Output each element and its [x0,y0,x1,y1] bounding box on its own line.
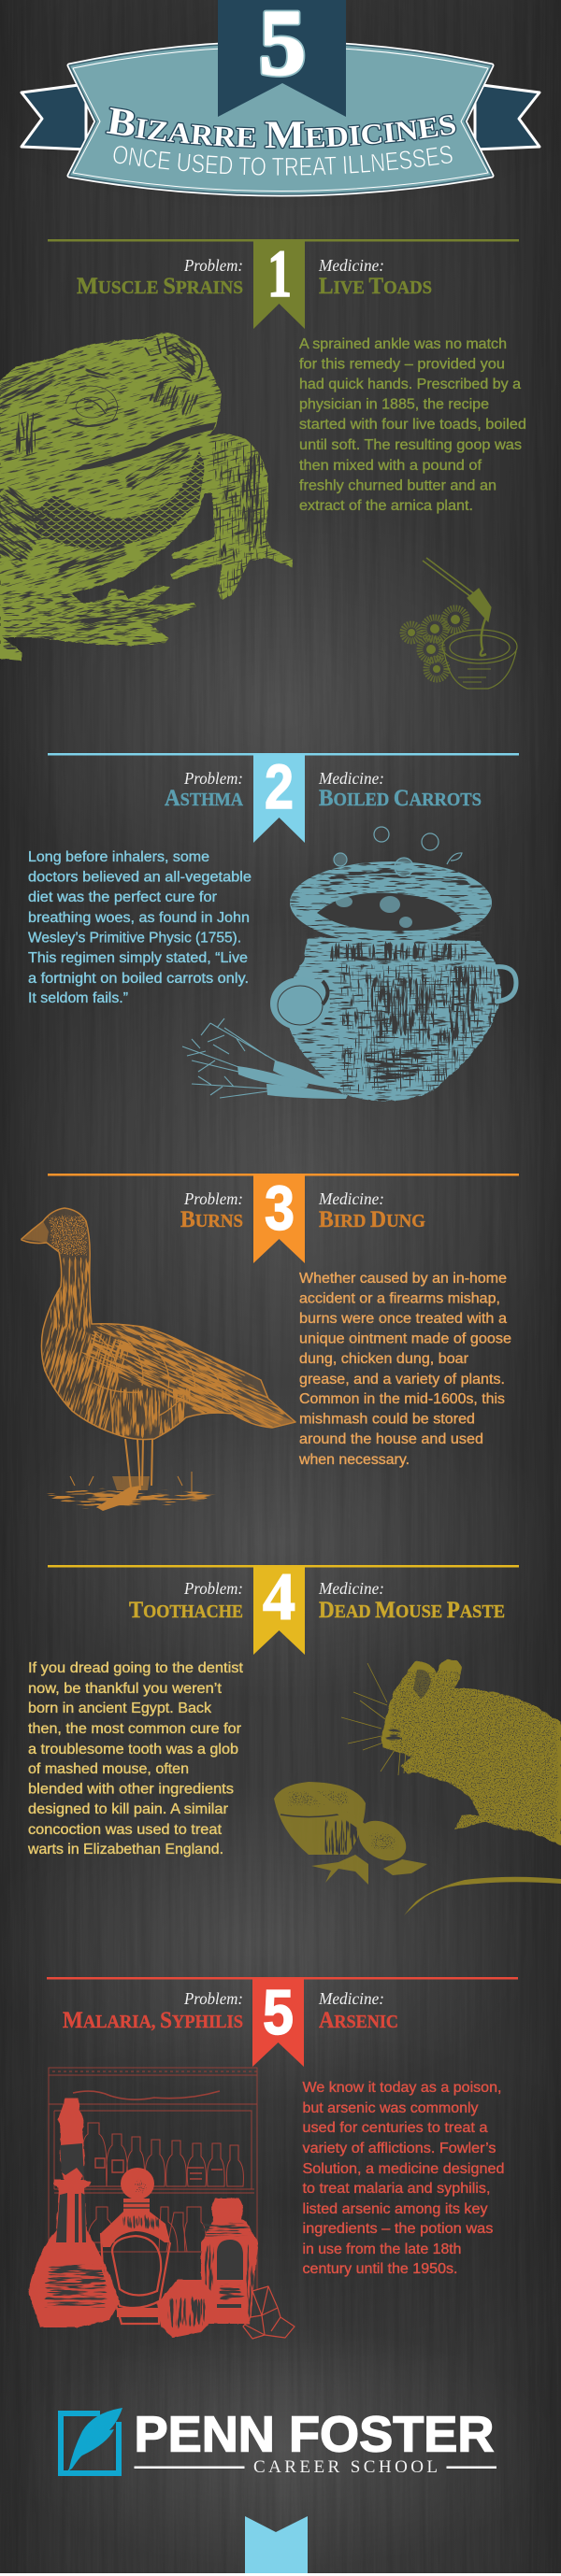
decanter [28,2099,120,2327]
body text: diet was the perfect cure for [28,890,217,905]
body text: now, be thankful you weren’t [28,1681,223,1697]
problem label: MALARIA, SYPHILIS [63,2008,243,2033]
goose plumage [43,1214,294,1439]
body text: Solution, a medicine designed [303,2161,505,2177]
icon: toad illustration [0,332,293,662]
number 3: 3 [265,1174,295,1244]
body text: burns were once treated with a [299,1311,507,1327]
number 4: 4 [263,1559,295,1634]
body text: accident or a firearms mishap, [299,1291,500,1306]
problem label: ASTHMA [165,786,244,811]
pot overall texture and hatching [280,860,505,1107]
body text: ingredients – the potion was [303,2221,494,2237]
toad eye highlights [149,391,183,406]
toad overall hatch [0,332,293,658]
mouse fur shading [385,1669,561,1839]
toad snout marks [145,336,202,385]
body text: concoction was used to treat [28,1822,223,1838]
pot bubbles [334,827,462,876]
toad eye [65,386,118,426]
body text: when necessary. [298,1452,410,1468]
body text: dung, chicken dung, boar [299,1351,468,1367]
logo feather [66,2408,122,2472]
shelf bottles [82,2123,243,2252]
body text: designed to kill pain. A similar [28,1801,228,1817]
right jar [201,2199,258,2324]
bowl [274,1782,366,1855]
body text: started with four live toads, boiled [299,417,526,433]
body text: breathing woes, as found in John [28,910,250,926]
mouse whiskers [341,1663,406,1775]
medicine label [318,769,482,811]
mouse body [381,1659,561,1845]
body text: then mixed with a pound of [299,458,482,474]
spoon [301,1783,369,1833]
center jar [101,2168,170,2324]
problem label: Problem: [183,256,243,275]
body text: unique ointment made of goose [299,1331,511,1347]
pot opening [317,893,462,931]
rule and number ribbon [48,1565,519,1655]
goose bill [22,1221,49,1243]
panel: section 1 live toads [0,236,526,689]
icon: mouse illustration [341,1659,561,1915]
problem label: TOOTHACHE [129,1598,243,1623]
body text: Whether caused by an in-home [299,1271,507,1287]
pot body [286,937,501,1101]
icon: bowl of paste [274,1782,427,1885]
toad hatching [0,334,264,634]
penn foster wordmark: PENN FOSTER [135,2407,494,2463]
mouse tail [404,1877,561,1915]
panel: section 2 boiled carrots [28,752,519,1107]
body text: Long before inhalers, some [28,849,209,865]
medicine label: ARSENIC [319,2008,398,2033]
body text: extract of the arnica plant. [299,498,473,514]
problem label: BURNS [180,1207,243,1232]
goose feet and ground [37,1472,229,1511]
apothecary cabinet [49,2068,257,2289]
problem label: Problem: [183,1189,243,1208]
body text [27,1660,244,1857]
icon: bubbling pot [182,827,516,1107]
body text: This regimen simply stated, “Live [28,950,248,966]
body text: freshly churned butter and an [299,478,496,493]
pot rim [290,861,492,944]
body text: in use from the late 18th [303,2242,462,2257]
goose legs [125,1439,152,1490]
medicine label: Medicine: [318,1189,384,1208]
problem label: Problem: [183,1579,243,1598]
body text: of mashed mouse, often [28,1761,189,1777]
body text: Common in the mid-1600s, this [299,1391,505,1407]
problem label [129,1579,243,1623]
body text: doctors believed an all-vegetable [28,869,252,886]
body text [28,849,252,1006]
body text: Wesley’s Primitive Physic (1755). [28,931,241,946]
body text: listed arsenic among its key [303,2201,488,2217]
title line two: ONCE USED TO TREAT ILLNESSES [114,146,453,176]
body text: warts in Elizabethan England. [27,1842,223,1857]
medicine label: Medicine: [318,769,384,788]
carrots [182,1018,348,1099]
icon: honey bowl and arnica [403,558,517,689]
number 2: 2 [265,752,294,822]
rule and number ribbon [47,1977,518,2067]
body text: It seldom fails.” [28,990,128,1006]
rule and number ribbon [48,753,519,843]
medicine label: LIVE TOADS [319,274,432,299]
medicine label: Medicine: [318,1579,384,1598]
mortar rock [157,2280,215,2338]
body text: If you dread going to the dentist [28,1660,244,1676]
body text: A sprained ankle was no match [299,336,507,352]
problem label: Problem: [183,1989,243,2008]
pot contents [336,896,412,928]
body text: century until the 1950s. [303,2261,458,2277]
logo square frame [61,2413,119,2473]
problem label [77,256,243,299]
rule and number ribbon [48,1174,519,1263]
body text: a troublesome tooth was a glob [28,1742,238,1758]
body text: blended with other ingredients [28,1781,234,1798]
medicine label [318,1189,425,1232]
problem label: Problem: [183,769,243,788]
number 5: 5 [263,1977,294,2048]
goose wing feathers [94,1331,223,1416]
body text [299,336,526,514]
body text: used for centuries to treat a [303,2120,488,2136]
body text [298,1271,511,1468]
problem label: MUSCLE SPRAINS [77,274,243,299]
medicine label [318,256,432,299]
body text: to treat malaria and syphilis, [303,2181,490,2197]
medicine label [318,1579,505,1623]
body text: We know it today as a poison, [303,2080,501,2096]
body text: around the house and used [299,1431,483,1447]
pot handles [272,967,516,1028]
panel: section 5 arsenic [28,1977,518,2339]
medicine label [318,1989,398,2033]
toad belly scales [31,451,204,549]
logo: penn foster [61,2407,496,2477]
medicine label: BIRD DUNG [319,1207,425,1232]
hanging dark ribbon [218,0,346,117]
crystals [243,2286,295,2339]
medicine label: Medicine: [318,1989,384,2008]
body text: physician in 1885, the recipe [299,396,489,413]
body text: for this remedy – provided you [299,357,505,372]
arnica flowers [403,608,467,679]
title line one: BIZARRE MEDICINES [105,107,456,149]
body text: then, the most common cure for [28,1721,241,1737]
bottom ribbon [245,2516,308,2573]
icon: apothecary bottles [28,2068,295,2339]
panel: section 4 dead mouse paste [28,1565,561,1915]
title banner [20,0,541,196]
body text [303,2080,505,2277]
problem label [63,1989,243,2033]
medicine label: BOILED CARROTS [319,786,482,811]
jar ruff [101,2212,170,2247]
icon: goose illustration [22,1208,295,1511]
panel: section 3 bird dung [22,1174,519,1511]
ribbon tails [22,84,539,149]
problem label [165,769,244,811]
body text: until soft. The resulting goop was [299,437,522,453]
body text: mishmash could be stored [299,1411,475,1428]
main teal ribbon [69,43,492,194]
body text: a fortnight on boiled carrots only. [28,971,249,987]
career school line: CAREER SCHOOL [253,2457,438,2477]
spice fragments [383,1859,427,1875]
medicine label: Medicine: [318,256,384,275]
body text: but arsenic was commonly [303,2100,479,2116]
medicine label: DEAD MOUSE PASTE [319,1598,505,1623]
body text: born in ancient Egypt. Back [28,1701,211,1716]
toad mouth [68,422,216,471]
jar body outlines [101,2233,170,2324]
body text: grease, and a variety of plants. [299,1372,505,1388]
rule and number ribbon [48,239,519,329]
goose body [22,1208,295,1440]
problem label [180,1189,243,1232]
number 1: 1 [267,236,292,311]
body text: had quick hands. Prescribed by a [299,377,521,392]
star anise [311,1855,368,1885]
body text: variety of afflictions. Fowler’s [303,2141,496,2156]
